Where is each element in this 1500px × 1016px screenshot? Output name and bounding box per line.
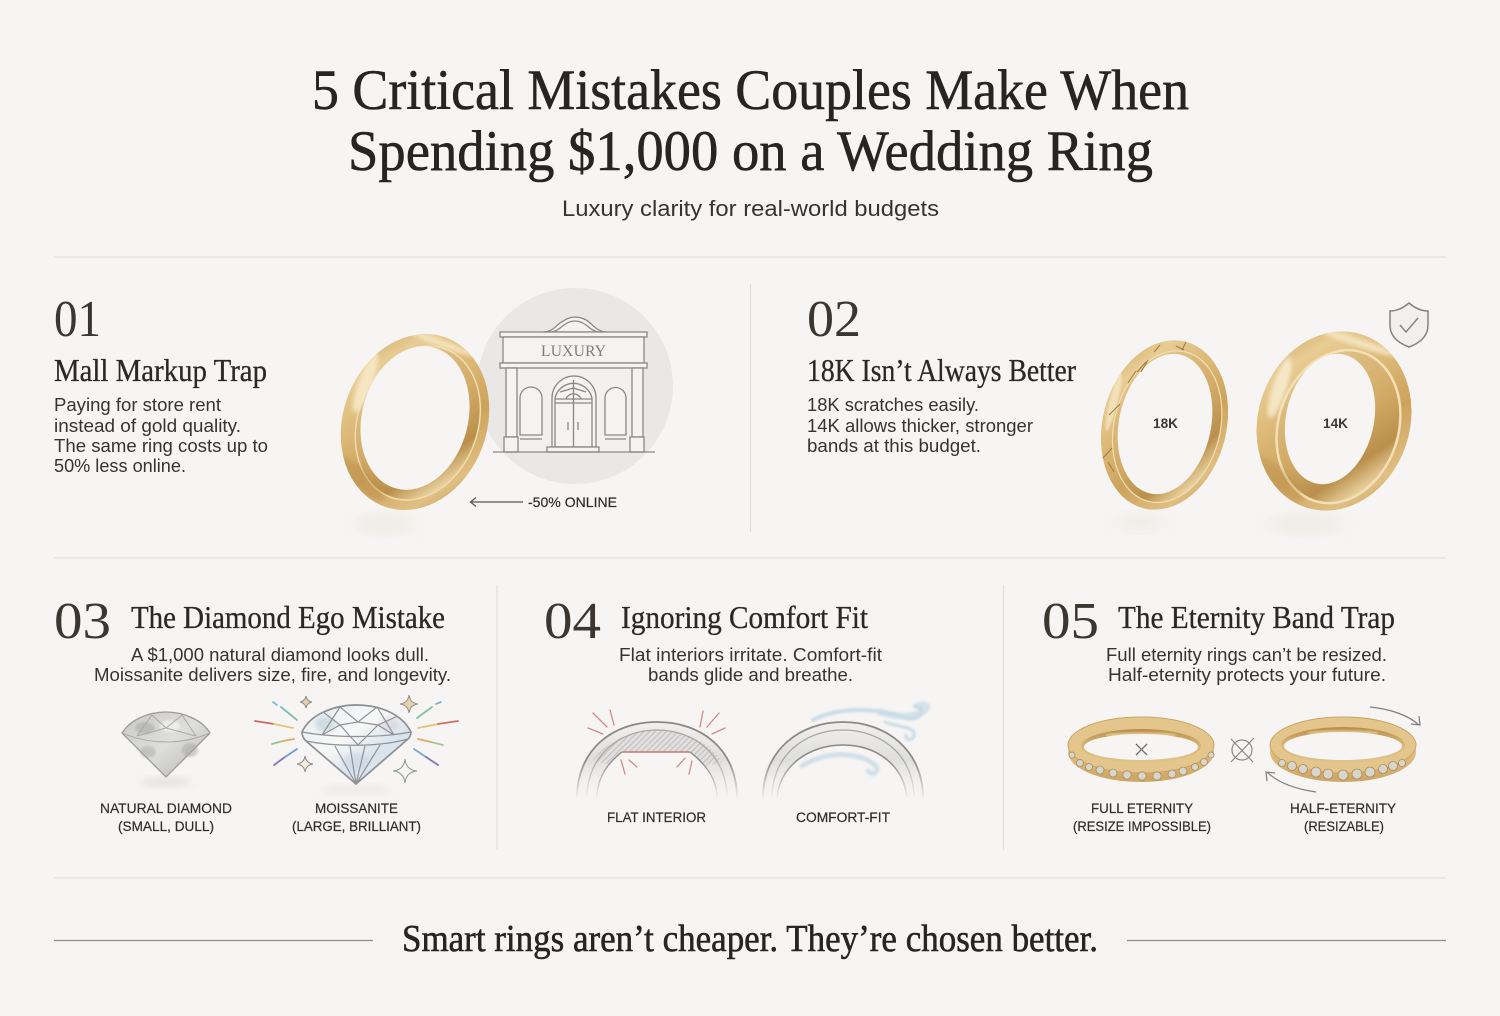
closing statement: Smart rings aren’t cheaper. They’re chosen better. (402, 918, 1098, 960)
heading 05: The Eternity Band Trap (1118, 599, 1395, 635)
label natural diamond: NATURAL DIAMOND (100, 800, 232, 816)
storefront sign: LUXURY (541, 343, 606, 360)
number 02: 02 (807, 291, 861, 348)
icon: moissanite with sparkle (255, 695, 458, 834)
ring: gold band (340, 334, 490, 532)
heading 04: Ignoring Comfort Fit (621, 599, 868, 635)
heading 03: The Diamond Ego Mistake (131, 599, 445, 635)
icon: x inside ring (1136, 744, 1147, 755)
diagram: comfort-fit band (763, 705, 927, 825)
body text 01: instead of gold quality. (54, 416, 241, 436)
body text 05: Half-eternity protects your future. (1108, 665, 1386, 685)
icon: crossed circle (1231, 738, 1254, 762)
diagram: flat interior band (577, 710, 737, 825)
label 14k: 14K (1323, 415, 1348, 431)
ring: half eternity band (1266, 707, 1420, 834)
title: Spending $1,000 on a Wedding Ring (348, 120, 1153, 183)
heading 01: Mall Markup Trap (54, 352, 267, 388)
body text 05: Full eternity rings can’t be resized. (1106, 645, 1387, 665)
label flat interior: FLAT INTERIOR (607, 809, 706, 825)
body text 02: 14K allows thicker, stronger (807, 416, 1033, 436)
label half eternity (1290, 800, 1397, 834)
subtitle: Luxury clarity for real-world budgets (562, 196, 939, 221)
number 04: 04 (544, 593, 601, 650)
title (312, 59, 1189, 183)
ring: thick 14k band (1256, 332, 1412, 532)
ring: full eternity band (1068, 717, 1214, 834)
number 05: 05 (1042, 593, 1099, 650)
body text 03: A $1,000 natural diamond looks dull. (131, 645, 429, 665)
arrow: minus 50 percent online (470, 494, 617, 510)
icon: luxury storefront (316, 288, 673, 533)
number 03: 03 (54, 593, 111, 650)
body text 01 (54, 395, 268, 476)
arrow: resize bottom (1266, 772, 1316, 792)
ring: thin 18k band with scratches (1100, 340, 1228, 527)
body text 04: bands glide and breathe. (648, 665, 853, 685)
panel: 02 18k isn't always better (807, 291, 1434, 534)
heading 02: 18K Isn’t Always Better (807, 352, 1076, 388)
label moissanite: MOISSANITE (315, 800, 398, 816)
body text 02 (807, 395, 1033, 456)
body text 05 (1106, 645, 1387, 685)
body text 01: 50% less online. (54, 456, 186, 476)
body text 04 (619, 645, 882, 685)
label moissanite (292, 800, 421, 834)
label natural diamond: (SMALL, DULL) (118, 818, 214, 834)
label half eternity: HALF-ETERNITY (1290, 800, 1397, 816)
body text 04: Flat interiors irritate. Comfort-fit (619, 645, 882, 665)
label comfort-fit: COMFORT-FIT (796, 809, 890, 825)
panel: 03 the diamond ego mistake (54, 593, 458, 834)
label 18k: 18K (1153, 415, 1178, 431)
label half eternity: (RESIZABLE) (1304, 818, 1384, 834)
label full eternity: FULL ETERNITY (1091, 800, 1194, 816)
label full eternity (1073, 800, 1211, 834)
body text 02: 18K scratches easily. (807, 395, 979, 415)
panel: 05 the eternity band trap (1042, 593, 1420, 834)
body text 03: Moissanite delivers size, fire, and longevity. (94, 665, 451, 685)
body text 02: bands at this budget. (807, 436, 981, 456)
arrow: minus 50 percent online: -50% ONLINE (528, 494, 617, 510)
panel: 01 mall markup trap (54, 288, 1446, 960)
panel: 04 ignoring comfort fit (544, 593, 927, 825)
title: 5 Critical Mistakes Couples Make When (312, 59, 1189, 122)
icon: shield check (1390, 303, 1428, 347)
number 01: 01 (54, 291, 101, 348)
body text 01: Paying for store rent (54, 395, 221, 415)
arrow: resize top (1370, 707, 1420, 725)
label moissanite: (LARGE, BRILLIANT) (292, 818, 421, 834)
icon: natural diamond (100, 712, 232, 834)
label natural diamond (100, 800, 232, 834)
label full eternity: (RESIZE IMPOSSIBLE) (1073, 818, 1211, 834)
body text 01: The same ring costs up to (54, 436, 268, 456)
body text 03 (94, 645, 451, 685)
